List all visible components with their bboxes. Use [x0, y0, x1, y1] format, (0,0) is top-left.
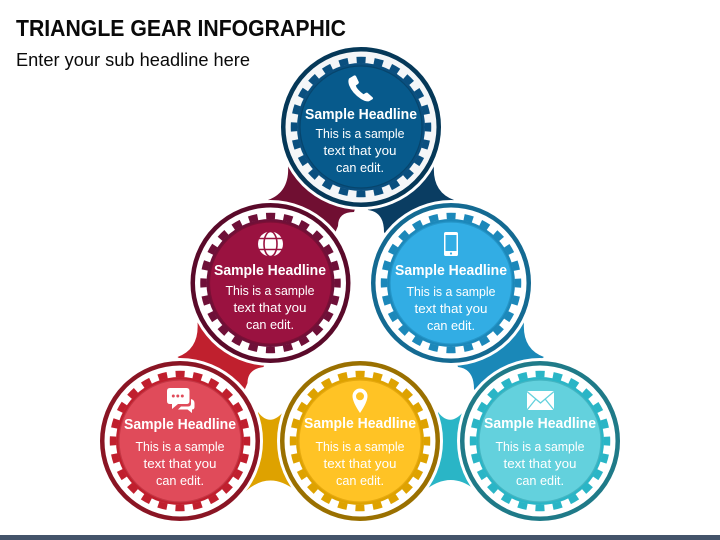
- icon: chat bubbles: [167, 388, 194, 413]
- text: red node: Sample Headline: [124, 417, 236, 433]
- text: teal node: Sample Headline: [484, 416, 596, 432]
- icon: phone: [348, 75, 373, 101]
- gear node: yellow: [277, 358, 443, 524]
- text: sky blue node: [395, 263, 507, 333]
- connector: blue: [451, 307, 544, 402]
- text: top node: This is a sample: [316, 126, 404, 141]
- text: sky blue node: text that you: [414, 301, 488, 316]
- connector: gold: [246, 411, 296, 491]
- text: maroon node: can edit.: [246, 317, 294, 332]
- text: yellow node: text that you: [324, 456, 396, 471]
- text: red node: This is a sample: [136, 439, 224, 454]
- text: top node: text that you: [324, 143, 396, 158]
- text: top node: [305, 107, 417, 175]
- gear node: top navy: [278, 44, 444, 210]
- text: red node: [124, 417, 236, 488]
- text: yellow node: can edit.: [336, 473, 384, 488]
- text: sky blue node: This is a sample: [406, 284, 496, 299]
- connector: navy: [361, 150, 454, 245]
- icon: map pin: [352, 389, 368, 413]
- footer bar: [0, 535, 720, 540]
- text: red node: text that you: [144, 456, 216, 471]
- text: maroon node: Sample Headline: [214, 263, 326, 279]
- subtitle: Enter your sub headline here: [16, 50, 250, 70]
- text: yellow node: [304, 416, 416, 488]
- text: maroon node: This is a sample: [226, 283, 314, 298]
- text: teal node: text that you: [504, 456, 576, 471]
- text: top node: Sample Headline: [305, 107, 417, 123]
- connector: red: [178, 307, 270, 402]
- text: sky blue node: Sample Headline: [395, 263, 507, 279]
- icon: envelope: [527, 391, 554, 410]
- text: top node: can edit.: [336, 160, 384, 175]
- text: teal node: [484, 416, 596, 488]
- gear node: maroon: [188, 200, 354, 366]
- connector: maroon: [268, 150, 361, 245]
- gear node: red: [97, 358, 263, 524]
- text: sky blue node: can edit.: [427, 318, 475, 333]
- icon: globe: [258, 232, 283, 256]
- connector: teal: [424, 411, 474, 491]
- text: teal node: can edit.: [516, 473, 564, 488]
- icon: mobile phone: [444, 232, 458, 256]
- text: yellow node: Sample Headline: [304, 416, 416, 432]
- text: maroon node: text that you: [234, 300, 306, 315]
- text: red node: can edit.: [156, 473, 204, 488]
- text: teal node: This is a sample: [496, 439, 584, 454]
- gear node: sky blue: [368, 200, 534, 366]
- title: TRIANGLE GEAR INFOGRAPHIC: [16, 15, 346, 41]
- text: yellow node: This is a sample: [316, 439, 404, 454]
- text: maroon node: [214, 263, 326, 332]
- gear node: teal: [457, 358, 623, 524]
